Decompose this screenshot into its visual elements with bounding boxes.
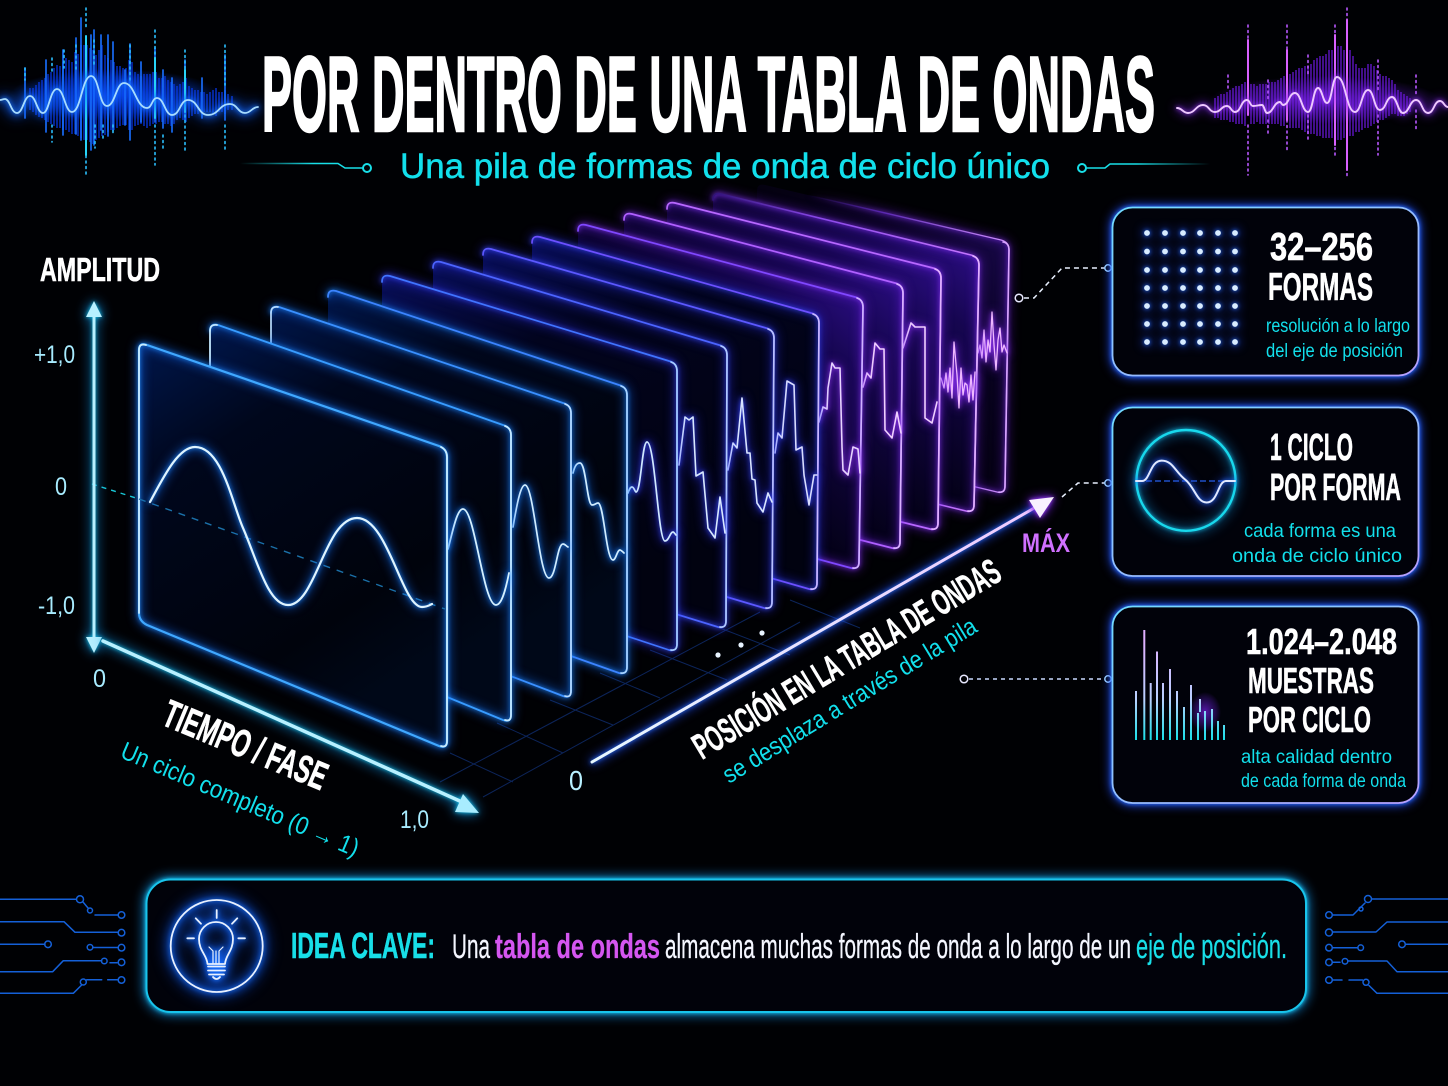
- circuit ornament: right: [1326, 896, 1448, 993]
- panel 6: [433, 262, 727, 627]
- panel 5: [382, 276, 677, 650]
- axis subtitle: Un ciclo completo (0 → 1): [117, 737, 363, 863]
- key idea sentence: Una: [452, 928, 490, 966]
- icon: light bulb: [171, 900, 263, 992]
- key idea sentence: eje de posición.: [1136, 928, 1287, 966]
- panel 12: [713, 194, 979, 511]
- tick label 0: 0: [55, 473, 67, 501]
- caption: [1241, 746, 1406, 792]
- icon: dot grid: [1144, 230, 1238, 345]
- panel: 32-256 forms: [1112, 208, 1418, 376]
- position axis end: MÁX: [1022, 527, 1070, 558]
- tick label +1,0: +1,0: [34, 341, 75, 369]
- panel: key idea: [146, 880, 1306, 1012]
- waveform ornament: purple, top right: [1177, 8, 1448, 178]
- axis title: tiempo / fase: TIEMPO / FASE: [157, 693, 334, 799]
- subtitle: Una pila de formas de onda de ciclo único: [400, 147, 1050, 186]
- icon: single cycle in ring: [1136, 430, 1236, 531]
- tick label -1,0: -1,0: [38, 592, 75, 620]
- zero line: [92, 484, 139, 499]
- time axis end: 1,0: [400, 806, 429, 834]
- stat: 32-256 formas: FORMAS: [1268, 266, 1373, 309]
- stat: 32-256 formas: 32–256: [1270, 226, 1373, 269]
- stat: samples: 1.024–2.048: [1246, 621, 1397, 662]
- connector: card 1: [1015, 265, 1111, 302]
- caption: [1232, 520, 1402, 567]
- stat: samples: POR CICLO: [1248, 699, 1371, 740]
- axis title: amplitud: AMPLITUD: [40, 251, 160, 288]
- caption: resolución a lo largo: [1266, 315, 1410, 337]
- caption: del eje de posición: [1266, 340, 1403, 362]
- stat: 1 ciclo por forma: [1270, 427, 1401, 509]
- axis subtitle: se desplaza a través de la pila: [718, 612, 982, 789]
- panel: 1 cycle per form: [1112, 408, 1418, 576]
- connector: card 3: [960, 675, 1111, 683]
- panel 4: [328, 291, 627, 673]
- panel 11: [667, 203, 941, 529]
- panel 9: [578, 225, 863, 568]
- axis title: posicion: POSICIÓN EN LA TABLA DE ONDAS: [684, 550, 1008, 767]
- panel 3: [271, 307, 571, 697]
- caption: onda de ciclo único: [1232, 545, 1402, 567]
- panel: samples per cycle: [1112, 606, 1418, 803]
- caption: alta calidad dentro: [1241, 746, 1392, 768]
- connector: card 2: [1062, 480, 1111, 497]
- waveform ornament: blue, top left: [0, 8, 258, 177]
- panel 8: [532, 237, 819, 589]
- continuation dots: [715, 630, 765, 658]
- panel 10: [624, 214, 903, 548]
- caption: de cada forma de onda: [1241, 770, 1406, 792]
- subtitle: [240, 147, 1210, 186]
- panel 7: [483, 249, 774, 608]
- time axis origin: 0: [93, 665, 106, 693]
- panel 1: front waveform: [139, 344, 447, 747]
- key idea sentence: tabla de ondas: [495, 928, 660, 966]
- stat: samples: [1246, 621, 1397, 740]
- stat: 1 ciclo por forma: 1 CICLO: [1270, 427, 1353, 469]
- time axis: [93, 641, 479, 863]
- panel 2: [210, 325, 511, 721]
- chart: harmonic bars: [1136, 630, 1224, 740]
- stat: 32-256 formas: [1268, 226, 1373, 309]
- wavetable stack: [139, 185, 1009, 747]
- circuit ornament: left: [0, 896, 125, 993]
- caption: [1266, 315, 1410, 362]
- stat: samples: MUESTRAS: [1248, 660, 1374, 701]
- position axis: [569, 497, 1070, 796]
- caption: cada forma es una: [1244, 520, 1396, 542]
- arrow head: [1029, 497, 1054, 518]
- key idea sentence: almacena muchas formas de onda a lo largo de un: [665, 928, 1131, 966]
- key idea label: IDEA CLAVE:: [291, 925, 435, 966]
- position axis origin: 0: [569, 765, 583, 796]
- panel 13: [757, 185, 1009, 492]
- amplitude axis: [34, 251, 160, 653]
- key idea sentence: [452, 928, 1287, 966]
